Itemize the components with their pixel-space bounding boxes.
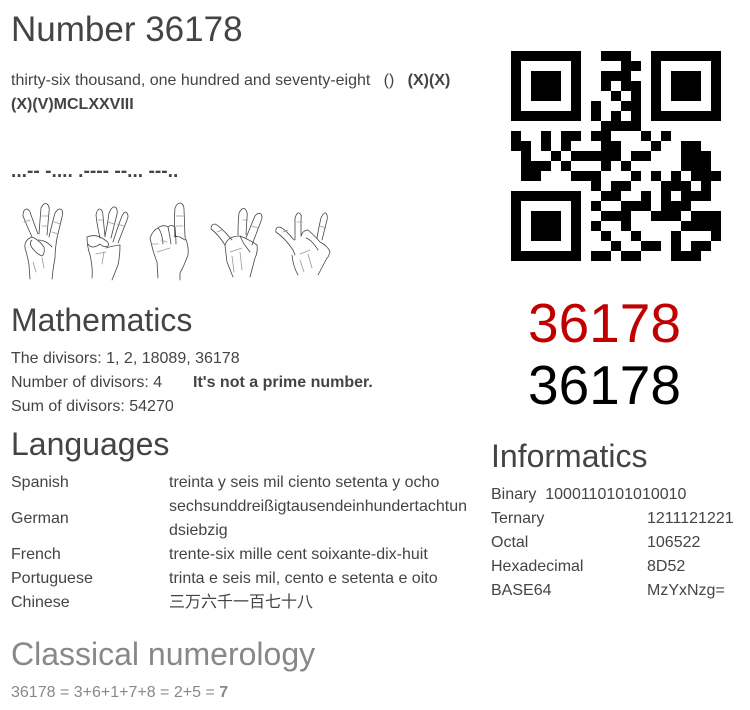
row: Hexadecimal: Hexadecimal (491, 558, 583, 575)
row: Hexadecimal (491, 558, 685, 575)
row: Ternary: 1211121221 (647, 510, 734, 527)
text block: mathematics facts (11, 350, 373, 415)
row: BASE64 (491, 582, 725, 599)
row: Chinese: 三万六千一百七十八 (169, 594, 313, 611)
row: Spanish (11, 474, 439, 491)
heading: Informatics: Informatics (491, 438, 647, 474)
row: French: trente-six mille cent soixante-dix-huit (169, 546, 428, 563)
row: Portuguese: trinta e seis mil, cento e setenta e oito (169, 570, 438, 587)
row: Ternary: Ternary (491, 510, 544, 527)
row: German: dsiebzig (169, 522, 228, 539)
row: Spanish: treinta y seis mil ciento setenta y ocho (169, 474, 439, 491)
row: Ternary (491, 510, 734, 527)
row: Octal (491, 534, 700, 551)
row: BASE64: BASE64 (491, 582, 551, 599)
text block: mathematics facts: The divisors: 1, 2, 18089, 36178 (11, 350, 240, 367)
row: BASE64: MzYxNzg= (647, 582, 725, 599)
heading: Languages: Languages (11, 426, 169, 462)
row: Spanish: Spanish (11, 474, 69, 491)
row: French: French (11, 546, 61, 563)
icon: hand 8 variant (276, 213, 330, 275)
text block: number in words and Roman numeral: thirty-six thousand, one hundred and seventy-eight () (X)(X) (11, 72, 450, 89)
row: Chinese (11, 593, 313, 611)
heading: Classical numerology: Classical numerology (11, 636, 315, 672)
icon: hand 3 (23, 204, 62, 279)
row: French (11, 546, 428, 563)
text block: mathematics facts: Number of divisors: 4 (11, 374, 162, 391)
icon: sign language hands (22, 202, 330, 280)
row: Binary: Binary 1000110101010010 (491, 486, 686, 503)
text block: mathematics facts: Sum of divisors: 54270 (11, 398, 174, 415)
table: number in languages (11, 474, 467, 611)
text block: number in words and Roman numeral: (X)(V)MCLXXVIII (11, 96, 134, 113)
row: Chinese: Chinese (11, 594, 70, 611)
row: Portuguese (11, 570, 438, 587)
text block: numerology sum: 36178 = 3+6+1+7+8 = 2+5 = 7 (11, 684, 228, 701)
icon: hand 6 (87, 207, 128, 280)
row: German: German (11, 510, 69, 527)
icon: hand 1 (150, 203, 188, 280)
row: Octal: Octal (491, 534, 528, 551)
row: Hexadecimal: 8D52 (647, 558, 685, 575)
title: Number 36178 (11, 10, 243, 49)
heading: Mathematics: Mathematics (11, 302, 192, 338)
text block: morse code: ...-- -.... .---- --... ---.. (11, 161, 178, 182)
table: number bases (491, 486, 734, 599)
row: German: sechsunddreißigtausendeinhundertachtun (169, 498, 467, 515)
big number: red: 36178 (528, 292, 681, 354)
icon: QR code (511, 51, 721, 261)
icon: hand 8 (211, 208, 262, 277)
text block: number in words and Roman numeral (11, 72, 450, 113)
row: Octal: 106522 (647, 534, 700, 551)
row: German (11, 498, 467, 539)
row: Portuguese: Portuguese (11, 570, 93, 587)
text block: mathematics facts: It's not a prime number. (193, 374, 373, 391)
big number: black: 36178 (528, 354, 681, 416)
